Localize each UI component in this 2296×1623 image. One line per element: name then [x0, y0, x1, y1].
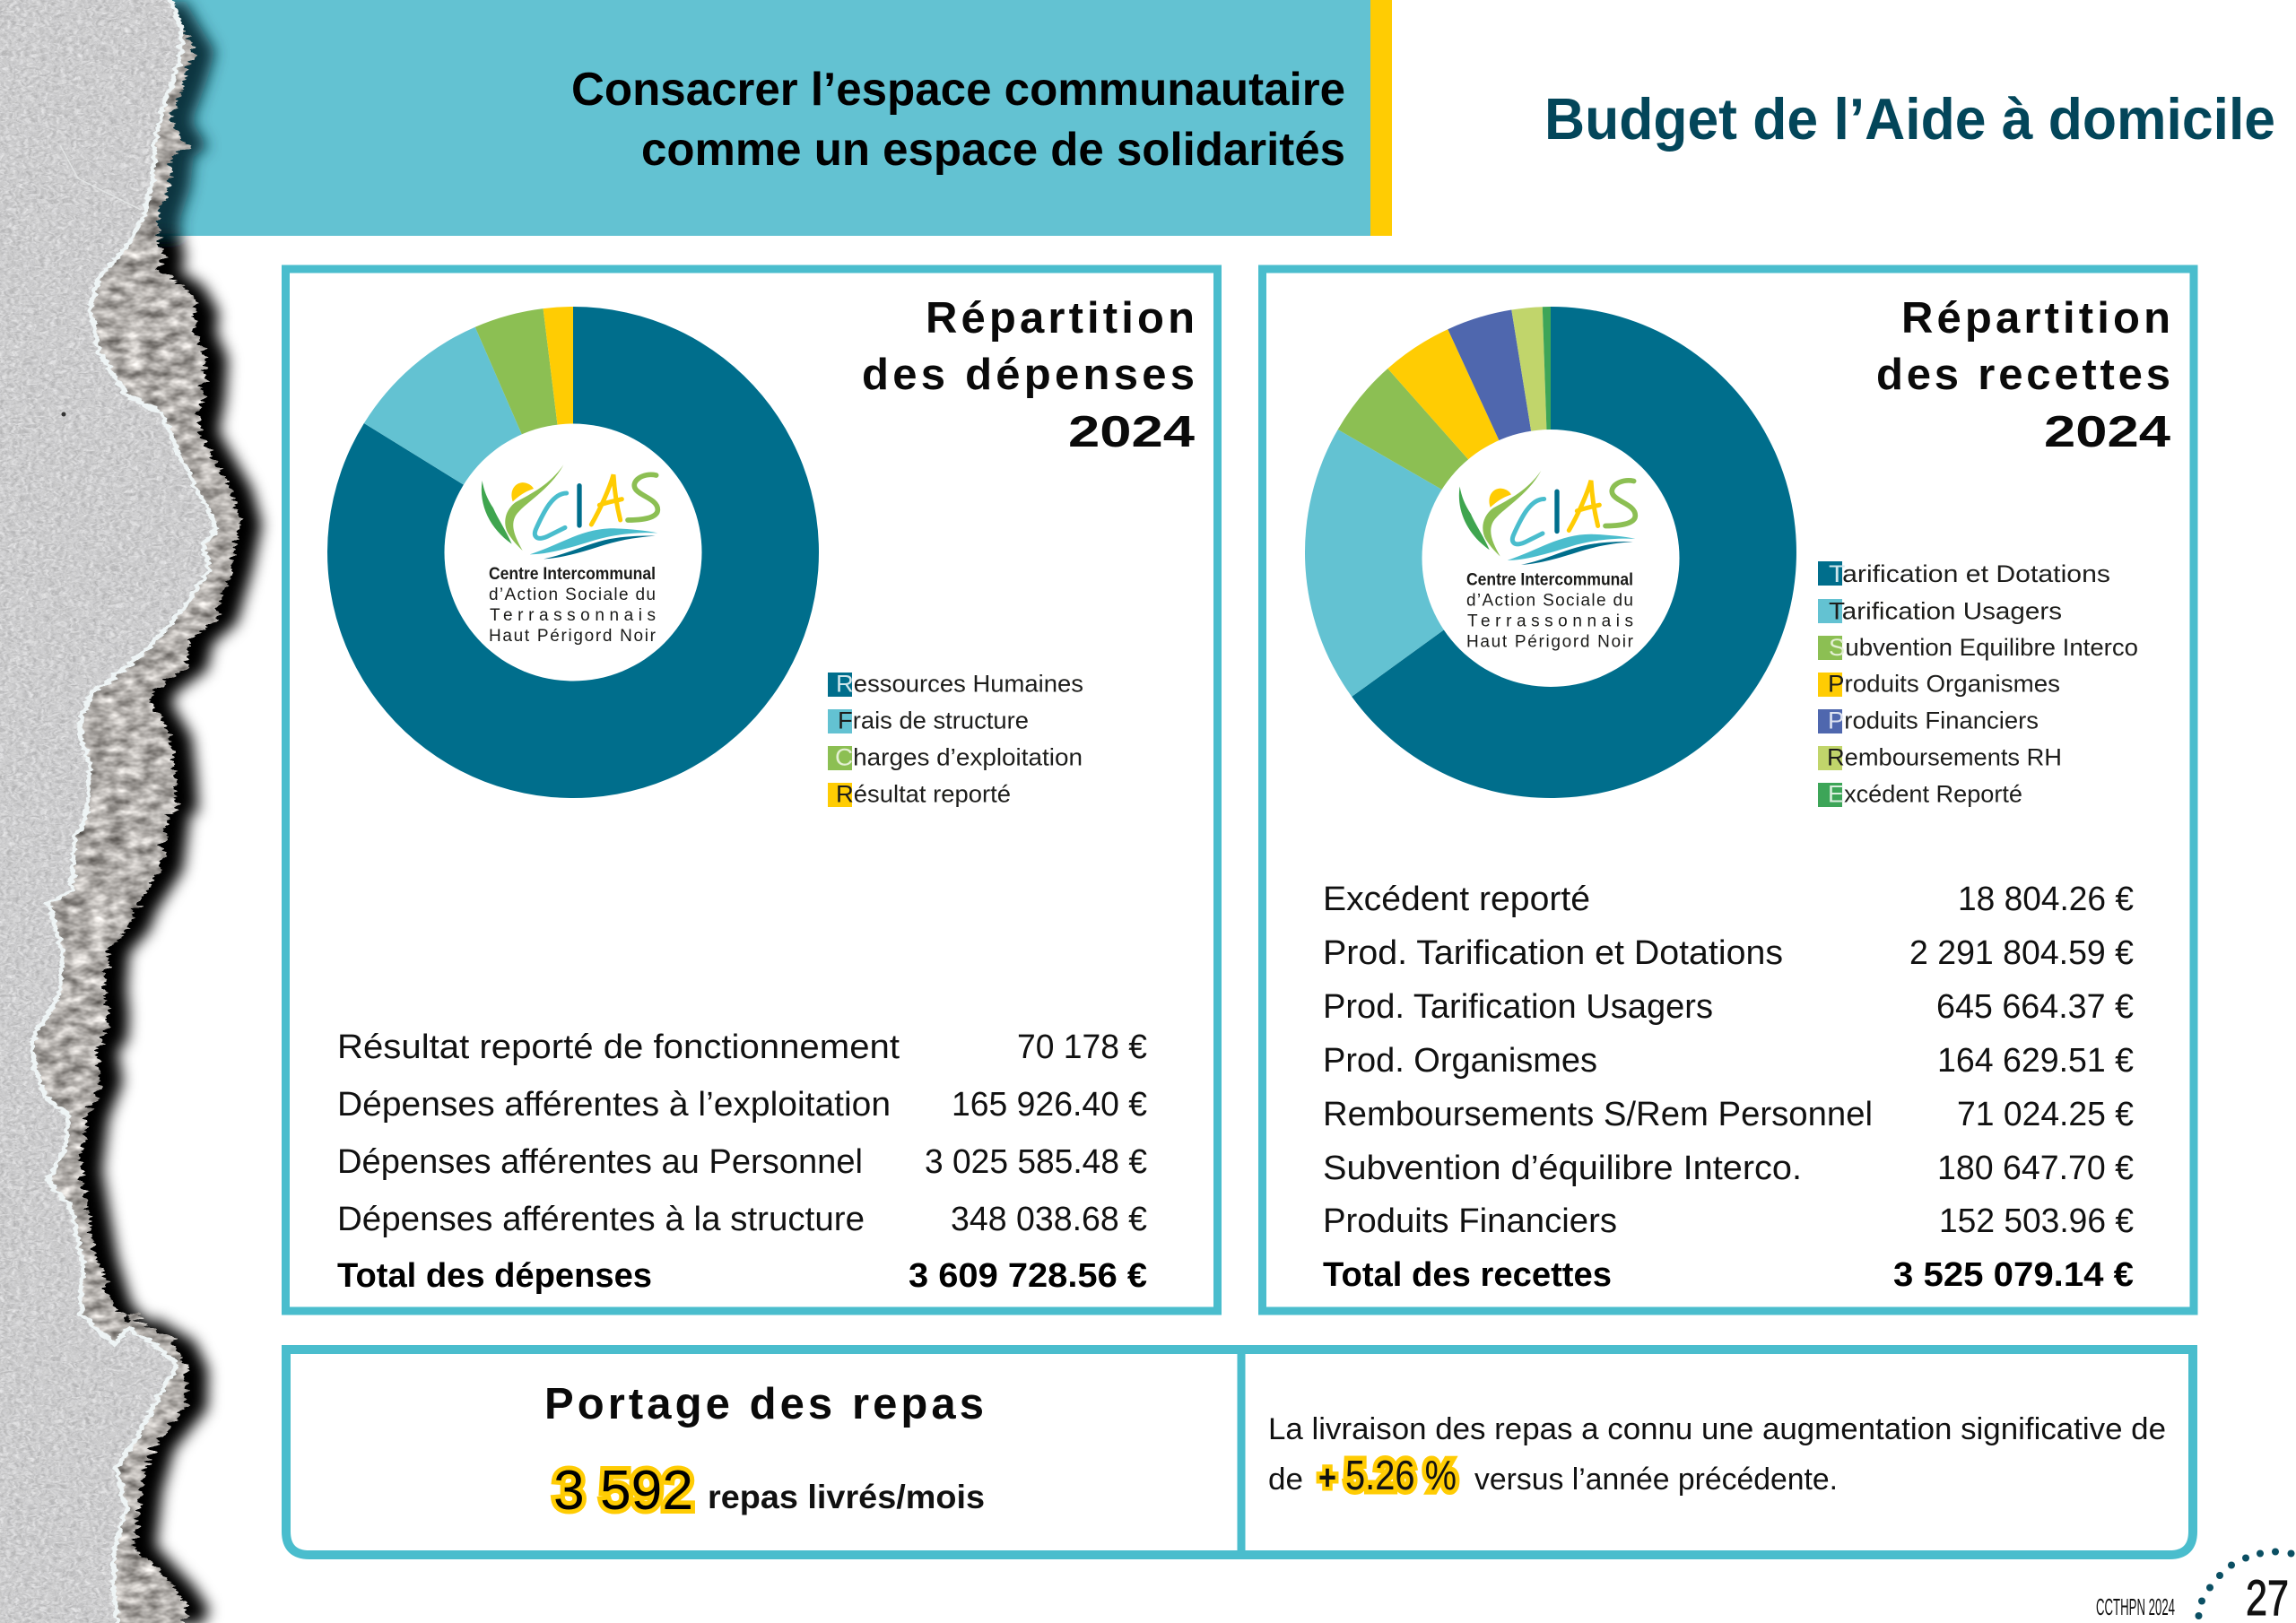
- icon: dotted arc: [2196, 1548, 2294, 1619]
- header band: [135, 0, 1392, 236]
- row: exploitation: Dépenses afférentes à l’exploitation: [337, 1086, 891, 1124]
- row: organismes: 164 629.51 €: [1937, 1042, 2134, 1080]
- heading: Répartition des recettes 2024: Répartition: [1901, 294, 2170, 343]
- row: structure: 348 038.68 €: [951, 1201, 1147, 1238]
- legend: recettes: Produits Organismes: [1828, 671, 2060, 698]
- title: Consacrer l'espace communautaire: Consacrer l’espace communautaire: [571, 64, 1345, 116]
- row: organismes: [1323, 1042, 2134, 1080]
- logo: CIAS: [1422, 430, 1679, 687]
- torn paper edge: [0, 0, 262, 1623]
- heading: Répartition des dépenses 2024: [862, 294, 1195, 456]
- logo: CIAS: Centre Intercommunal: [489, 565, 656, 584]
- row: remboursements: Remboursements S/Rem Personnel: [1323, 1096, 1873, 1133]
- row: produits financiers: 152 503.96 €: [1939, 1202, 2134, 1240]
- heading: Répartition des recettes 2024: [1876, 294, 2170, 456]
- heading: Répartition des recettes 2024: 2024: [2044, 408, 2170, 456]
- legend: recettes: Excédent Reporté: [1828, 780, 2022, 807]
- row: personnel: 3 025 585.48 €: [925, 1143, 1147, 1181]
- legend: recettes: Tarification Usagers: [1829, 597, 2062, 624]
- legend: recettes: Produits Financiers: [1828, 707, 2039, 733]
- heading: Répartition des recettes 2024: des recettes: [1876, 351, 2170, 399]
- legend: dépenses: [828, 671, 1083, 807]
- text block: augmentation: 5.26 %: [1345, 1452, 1457, 1498]
- row: tarification et dotations: [1323, 934, 2134, 972]
- row: excédent reporté: Excédent reporté: [1323, 881, 1590, 918]
- legend: recettes: Remboursements RH: [1827, 744, 2062, 771]
- legend: dépenses: Charges d’exploitation: [835, 744, 1083, 771]
- heading: Répartition des dépenses 2024: 2024: [1068, 408, 1195, 456]
- row: résultat reporté: 70 178 €: [1017, 1028, 1147, 1066]
- legend: dépenses: Résultat reporté: [836, 780, 1011, 807]
- row: subvention: 180 647.70 €: [1937, 1150, 2134, 1187]
- logo: CIAS: [445, 423, 701, 681]
- donut chart: dépenses: [327, 307, 819, 798]
- row: total des dépenses: 3 609 728.56 €: [909, 1257, 1147, 1295]
- title: Consacrer l'espace communautaire: comme un espace de solidarités: [641, 124, 1345, 176]
- footer: document label: CCTHPN 2024: [2096, 1593, 2175, 1620]
- table: dépenses: [337, 1028, 1147, 1295]
- panel: dépenses: [285, 269, 1218, 1311]
- logo: CIAS: d’Action Sociale du: [489, 586, 656, 604]
- text block: augmentation: +: [1318, 1458, 1336, 1497]
- stat: repas livrés par mois: [553, 1460, 985, 1522]
- heading: Budget de l'Aide à domicile: Budget de l’Aide à domicile: [1544, 86, 2275, 152]
- table: recettes: [1323, 881, 2134, 1294]
- legend: recettes: [1818, 560, 2138, 807]
- heading: Portage des repas: Portage des repas: [544, 1380, 984, 1428]
- row: excédent reporté: [1323, 881, 2134, 918]
- legend: recettes: Subvention Equilibre Interco: [1829, 634, 2138, 661]
- row: total des recettes: [1323, 1256, 2134, 1294]
- row: total des recettes: 3 525 079.14 €: [1893, 1256, 2134, 1294]
- text block: augmentation: La livraison des repas a connu une augmentation significative de: [1268, 1412, 2166, 1446]
- row: produits financiers: Produits Financiers: [1323, 1202, 1617, 1240]
- text block: augmentation: versus l’année précédente.: [1474, 1462, 1838, 1497]
- row: tarification et dotations: Prod. Tarification et Dotations: [1323, 934, 1783, 972]
- title: Consacrer l'espace communautaire: [571, 64, 1345, 176]
- row: tarification usagers: 645 664.37 €: [1936, 988, 2134, 1026]
- legend: dépenses: Frais de structure: [838, 707, 1029, 733]
- logo: CIAS: Terrassonnais: [490, 606, 656, 625]
- row: excédent reporté: 18 804.26 €: [1958, 881, 2134, 918]
- row: subvention: Subvention d’équilibre Interco.: [1323, 1150, 1802, 1187]
- logo: CIAS: d’Action Sociale du: [1466, 592, 1633, 610]
- row: structure: Dépenses afférentes à la structure: [337, 1201, 865, 1238]
- row: remboursements: 71 024.25 €: [1957, 1096, 2134, 1133]
- logo: CIAS: Haut Périgord Noir: [489, 627, 657, 646]
- logo: CIAS: Terrassonnais: [1467, 612, 1633, 631]
- row: structure: [337, 1201, 1147, 1238]
- panel: recettes: [1263, 269, 2194, 1311]
- row: total des dépenses: Total des dépenses: [337, 1257, 652, 1295]
- row: organismes: Prod. Organismes: [1323, 1042, 1597, 1080]
- row: remboursements: [1323, 1096, 2134, 1133]
- row: produits financiers: [1323, 1202, 2134, 1240]
- text block: augmentation: [1268, 1412, 2166, 1498]
- logo: CIAS: Centre Intercommunal: [1466, 570, 1633, 590]
- stat: repas livrés par mois: repas livrés/mois: [708, 1479, 985, 1515]
- donut chart: recettes: [1305, 307, 1796, 798]
- row: résultat reporté: [337, 1028, 1147, 1066]
- logo: CIAS: Haut Périgord Noir: [1466, 633, 1634, 651]
- heading: Répartition des dépenses 2024: Répartition: [926, 294, 1195, 343]
- row: exploitation: [337, 1086, 1147, 1124]
- row: personnel: [337, 1143, 1147, 1181]
- text block: augmentation: de: [1268, 1462, 1303, 1497]
- row: subvention: [1323, 1150, 2134, 1187]
- legend: recettes: Tarification et Dotations: [1829, 560, 2110, 587]
- row: résultat reporté: Résultat reporté de fonctionnement: [337, 1028, 900, 1066]
- stat: repas livrés par mois: 3 592: [553, 1460, 693, 1522]
- panel: portage des repas: [286, 1345, 2193, 1559]
- row: total des recettes: Total des recettes: [1323, 1256, 1612, 1294]
- legend: dépenses: Ressources Humaines: [836, 671, 1083, 698]
- row: tarification usagers: [1323, 988, 2134, 1026]
- row: exploitation: 165 926.40 €: [952, 1086, 1147, 1124]
- row: tarification usagers: Prod. Tarification Usagers: [1323, 988, 1713, 1026]
- row: tarification et dotations: 2 291 804.59 €: [1909, 934, 2134, 972]
- row: personnel: Dépenses afférentes au Personnel: [337, 1143, 863, 1181]
- row: total des dépenses: [337, 1257, 1147, 1295]
- heading: Répartition des dépenses 2024: des dépenses: [862, 351, 1195, 399]
